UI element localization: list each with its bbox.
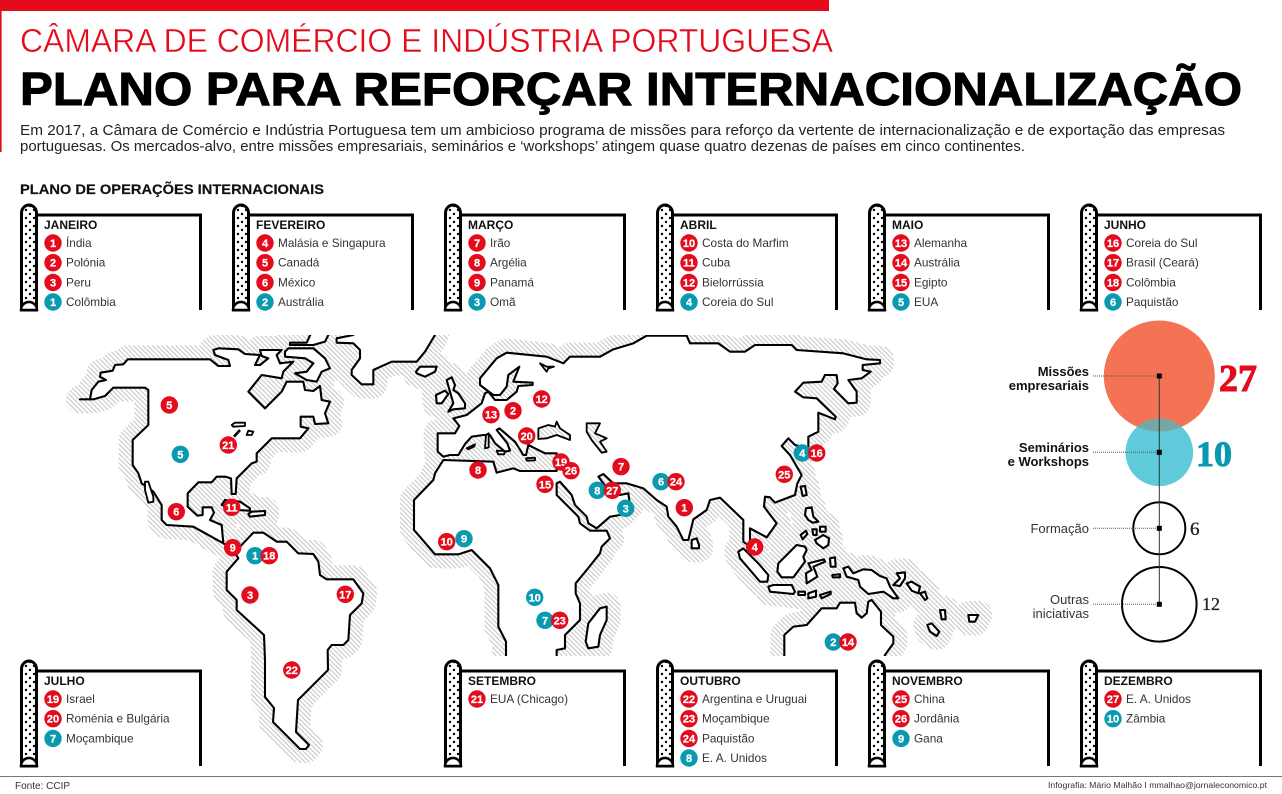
panel: Fevereiro: 5	[262, 258, 268, 270]
panel: Junho: Coreia do Sul	[1126, 236, 1197, 250]
map markers: missions and workshops: 10	[529, 592, 541, 604]
panel: Abril: Cuba	[702, 256, 731, 270]
panel: Julho: Israel	[66, 692, 95, 706]
map markers: missions and workshops: 26	[565, 466, 577, 478]
map markers: missions and workshops	[161, 390, 857, 679]
panel: Março: MARÇO	[468, 218, 513, 232]
panel: Janeiro: 1	[50, 238, 56, 250]
map markers: missions and workshops: 17	[339, 589, 351, 601]
panel: Julho: Moçambique	[66, 732, 134, 746]
bubble: Seminários e Workshops 10	[1126, 418, 1193, 486]
map markers: missions and workshops: 22	[286, 665, 298, 677]
panel: Dezembro: 27	[1107, 694, 1119, 706]
map markers: missions and workshops: 11	[226, 502, 238, 514]
panel: Fevereiro: Canadá	[278, 256, 320, 270]
panel: Novembro: NOVEMBRO	[892, 674, 963, 688]
panel: Setembro: EUA (Chicago)	[490, 692, 568, 706]
map markers: missions and workshops: 25	[778, 469, 790, 481]
value: 6: 6	[1190, 519, 1200, 540]
panel: Outubro: Moçambique	[702, 712, 770, 726]
panel: Outubro: 23	[683, 714, 695, 726]
panel: Junho: JUNHO	[1104, 218, 1146, 232]
panel: Junho: 6	[1110, 297, 1116, 309]
panel: Novembro: 26	[895, 714, 907, 726]
panel: Dezembro: DEZEMBRO	[1104, 674, 1173, 688]
map markers: missions and workshops: 6	[658, 477, 664, 489]
top red bar	[0, 0, 829, 11]
panel: Março: Panamá	[490, 276, 534, 290]
panel: Julho: 7	[50, 734, 56, 746]
panel: Maio: Austrália	[914, 256, 960, 270]
map markers: missions and workshops: 2	[510, 406, 516, 418]
value: 10: 10	[1196, 434, 1232, 474]
vertical axis and leader lines	[1093, 374, 1162, 607]
label: Outras iniciativas: iniciativas	[1033, 606, 1089, 621]
panel: Fevereiro: México	[278, 276, 316, 290]
label: Missões empresariais: Missões	[1038, 364, 1089, 379]
panel: Julho: 20	[47, 714, 59, 726]
panel: Fevereiro: 2	[262, 297, 268, 309]
panel: Abril	[657, 205, 836, 311]
label: Outras iniciativas	[1033, 592, 1089, 621]
panel: Abril: 10	[683, 238, 695, 250]
map markers: missions and workshops: 5	[166, 400, 172, 412]
panel: Fevereiro: 6	[262, 278, 268, 290]
panel: Outubro: Argentina e Uruguai	[702, 692, 807, 706]
map markers: missions and workshops: 6	[173, 507, 179, 519]
value: 12: 12	[1202, 594, 1220, 614]
panel: Abril: Bielorrússia	[702, 276, 764, 290]
title: headline: PLANO PARA REFORÇAR INTERNACIONALIZAÇÃO	[20, 63, 1242, 115]
panel: Março: Irão	[490, 236, 511, 250]
panel: Maio: Egipto	[914, 276, 948, 290]
map markers: missions and workshops: 9	[230, 543, 236, 555]
map markers: missions and workshops: 19	[555, 457, 567, 469]
footer rule	[0, 776, 1282, 777]
intro paragraph: Em 2017, a Câmara de Comércio e Indústria Portuguesa tem um ambicioso programa de missões para reforço da vertente de internacionalização e de exportação das empresas	[20, 123, 1225, 139]
map markers: missions and workshops: 14	[842, 637, 855, 649]
panel: Dezembro: E. A. Unidos	[1126, 692, 1191, 706]
map markers: missions and workshops: 27	[606, 485, 618, 497]
panel: Janeiro: Índia	[66, 236, 92, 250]
panel: Abril: ABRIL	[680, 218, 717, 232]
panel: Outubro: 22	[683, 694, 695, 706]
map markers: missions and workshops: 20	[521, 431, 533, 443]
panel: Abril: 11	[683, 258, 695, 270]
label: Outras iniciativas: Outras	[1050, 592, 1089, 607]
panel: Maio: Alemanha	[914, 236, 968, 250]
panel: Janeiro: Peru	[66, 276, 91, 290]
map markers: missions and workshops: 18	[263, 551, 275, 563]
panel: Julho	[21, 661, 200, 766]
panel: Julho: JULHO	[44, 674, 85, 688]
panel: Outubro: OUTUBRO	[680, 674, 741, 688]
panel: Janeiro: Colômbia	[66, 295, 116, 309]
panel: Maio: EUA	[914, 295, 938, 309]
panel: Novembro: Jordânia	[914, 712, 960, 726]
panel: Junho: 16	[1107, 238, 1119, 250]
bubble: Outras iniciativas 12	[1122, 567, 1197, 642]
panel: Março: 9	[474, 278, 480, 290]
panel: Outubro	[657, 661, 836, 767]
panel: Outubro: 24	[683, 734, 696, 746]
credits: Infografia: Mário Malhão I mmalhao@jornaleconomico.pt	[1048, 780, 1268, 790]
panel: Outubro: 8	[686, 753, 692, 765]
panel: Janeiro	[21, 205, 200, 311]
panel: Dezembro: Zâmbia	[1126, 712, 1166, 726]
map markers: missions and workshops: 4	[752, 542, 759, 554]
map markers: missions and workshops: 1	[252, 551, 258, 563]
map markers: missions and workshops: 7	[542, 615, 548, 627]
map markers: missions and workshops: 10	[441, 537, 453, 549]
panel: Março: Omã	[490, 295, 516, 309]
panel: Maio: 15	[895, 278, 907, 290]
panel: Novembro: China	[914, 692, 945, 706]
world map	[80, 327, 978, 749]
panel: Outubro: Paquistão	[702, 732, 755, 746]
map markers: missions and workshops: 3	[623, 503, 629, 515]
panel: Setembro	[445, 661, 624, 766]
map markers: missions and workshops: 2	[830, 637, 836, 649]
label: Missões empresariais: empresariais	[1009, 378, 1089, 393]
left red rule	[0, 11, 2, 152]
map markers: missions and workshops: 9	[461, 534, 467, 546]
panel: Novembro: 9	[898, 734, 904, 746]
label: Seminários e Workshops	[1008, 440, 1089, 469]
panel: Dezembro	[1081, 661, 1260, 766]
panel: Maio	[869, 205, 1048, 311]
panel: Março: 7	[474, 238, 480, 250]
label: Missões empresariais	[1009, 364, 1089, 393]
panel: Junho: Paquistão	[1126, 295, 1179, 309]
panel: Novembro: 25	[895, 694, 907, 706]
panel: Fevereiro: Malásia e Singapura	[278, 236, 386, 250]
intro paragraph	[20, 123, 1225, 155]
panel: Dezembro: 10	[1107, 714, 1119, 726]
bubble: Formação 6	[1133, 502, 1185, 554]
map markers: missions and workshops: 13	[485, 410, 497, 422]
bubble chart: initiatives by type	[1008, 320, 1257, 642]
panel: Maio: 5	[898, 297, 904, 309]
panel: Abril: 12	[683, 278, 695, 290]
source: Fonte: CCIP	[15, 781, 70, 792]
panel: Fevereiro: 4	[262, 238, 269, 250]
map markers: missions and workshops: 7	[618, 462, 624, 474]
label: Formação: Formação	[1030, 521, 1089, 536]
panel: Maio: 14	[895, 258, 908, 270]
panel: Junho: 17	[1107, 258, 1119, 270]
panel: Abril: 4	[686, 297, 693, 309]
map markers: missions and workshops: 12	[536, 394, 548, 406]
panel: Julho: Roménia e Bulgária	[66, 712, 170, 726]
value: 27: 27	[1219, 358, 1257, 400]
label: Seminários e Workshops: e Workshops	[1008, 454, 1089, 469]
panel: Abril: Coreia do Sul	[702, 295, 773, 309]
map markers: missions and workshops: 3	[247, 590, 253, 602]
panel: Setembro: SETEMBRO	[468, 674, 536, 688]
panel: Abril: Costa do Marfim	[702, 236, 789, 250]
map markers: missions and workshops: 5	[177, 449, 183, 461]
panel: Março	[445, 205, 624, 311]
bubble: Missões empresariais 27	[1104, 320, 1215, 432]
panel: Março: Argélia	[490, 256, 527, 270]
map markers: missions and workshops: 8	[594, 485, 600, 497]
panel: Setembro: 21	[471, 694, 483, 706]
map markers: missions and workshops: 21	[222, 440, 234, 452]
panel: Março: 8	[474, 258, 480, 270]
panel: Fevereiro: Austrália	[278, 295, 324, 309]
panel: Janeiro: Polónia	[66, 256, 106, 270]
panel: Janeiro: 1	[50, 297, 56, 309]
panel: Junho: Brasil (Ceará)	[1126, 256, 1199, 270]
panel: Janeiro: 3	[50, 278, 56, 290]
section heading: PLANO DE OPERAÇÕES INTERNACIONAIS	[20, 180, 324, 197]
map markers: missions and workshops: 15	[539, 479, 551, 491]
panel: Novembro: Gana	[914, 732, 943, 746]
panel: Novembro	[869, 661, 1048, 766]
map markers: missions and workshops: 23	[554, 615, 566, 627]
intro paragraph: portuguesas. Os mercados-alvo, entre missões empresariais, seminários e ‘workshops’ atingem quase quatro dezenas de países em cinco continentes.	[20, 139, 1025, 155]
panel: Outubro: E. A. Unidos	[702, 751, 767, 765]
panel: Fevereiro: FEVEREIRO	[256, 218, 325, 232]
panel: Maio: 13	[895, 238, 907, 250]
panel: Janeiro: 2	[50, 258, 56, 270]
panel: Fevereiro	[233, 205, 412, 311]
panel: Junho: 18	[1107, 278, 1119, 290]
title: organisation: CÂMARA DE COMÉRCIO E INDÚSTRIA PORTUGUESA	[20, 22, 834, 60]
map markers: missions and workshops: 4	[799, 448, 806, 460]
map markers: missions and workshops: 8	[475, 465, 481, 477]
panel: Janeiro: JANEIRO	[44, 218, 97, 232]
label: Seminários e Workshops: Seminários	[1019, 440, 1089, 455]
panel: Julho: 19	[47, 694, 59, 706]
panel: Março: 3	[474, 297, 480, 309]
map markers: missions and workshops: 16	[811, 448, 823, 460]
map markers: missions and workshops: 1	[681, 503, 687, 515]
panel: Junho	[1081, 205, 1260, 311]
panel: Maio: MAIO	[892, 218, 923, 232]
panel: Junho: Colômbia	[1126, 276, 1176, 290]
bubble overlap	[1137, 418, 1182, 432]
map markers: missions and workshops: 24	[670, 477, 683, 489]
